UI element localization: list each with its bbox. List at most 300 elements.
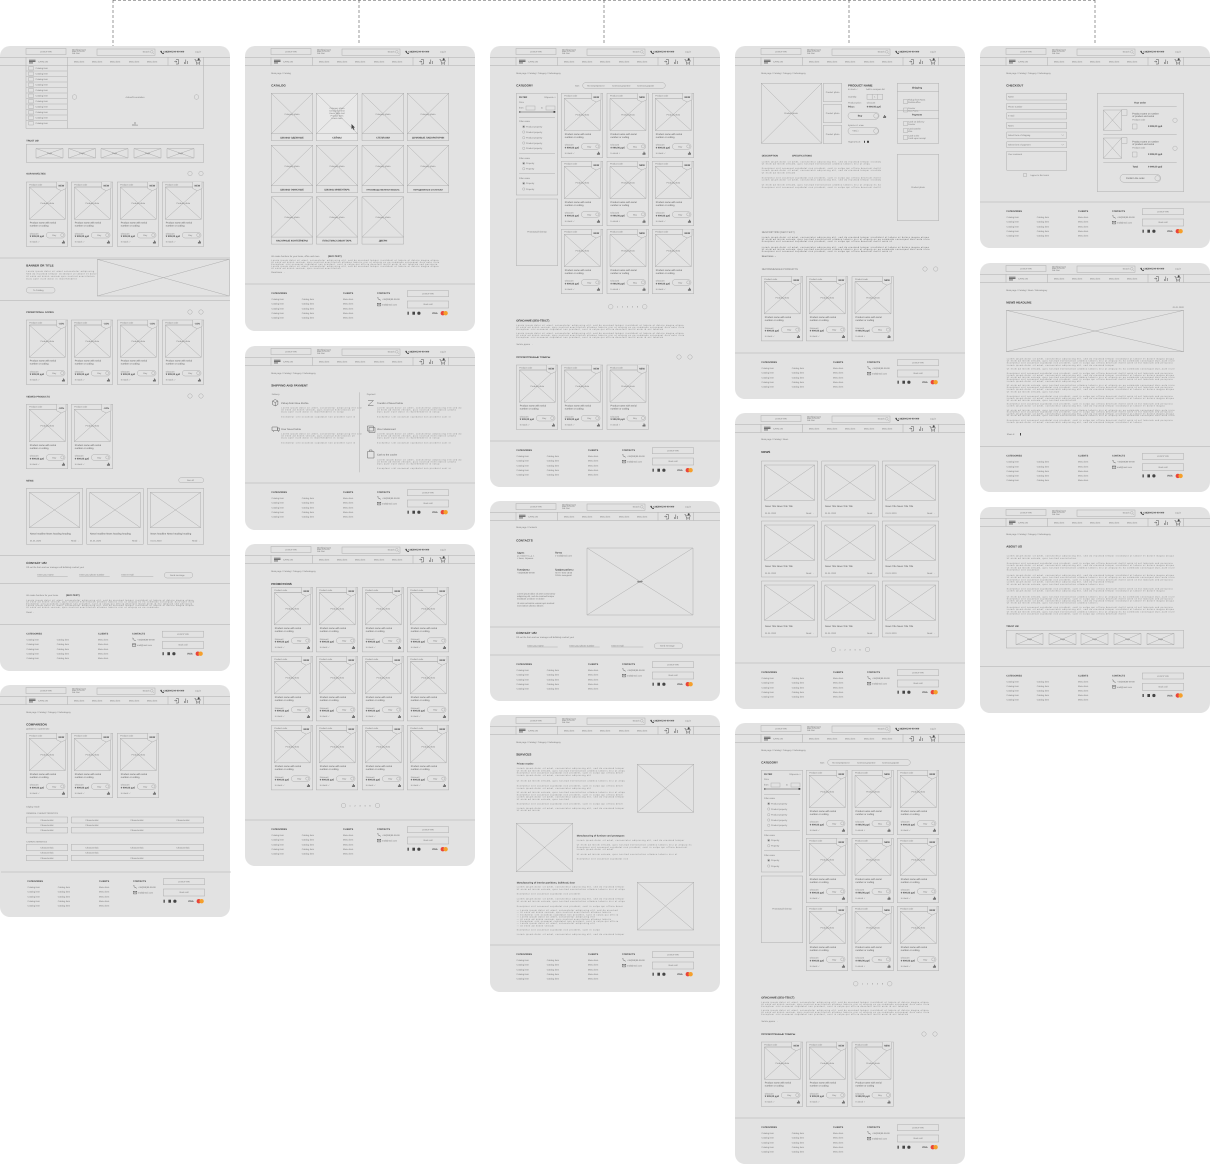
footer: Catalog item <box>28 895 40 898</box>
payment column: Ut enim ad minim veniam, quis nostrud exercitation ullamc <box>377 409 456 412</box>
trust us: Logo <box>80 152 85 155</box>
catalog list: Catalog item <box>36 106 48 108</box>
product card: Product code <box>655 231 669 234</box>
product card: Product photo <box>40 424 55 427</box>
news grid: News Title News Title Title <box>886 565 914 568</box>
product card: Discount <box>656 280 665 283</box>
category tiles: Category photo <box>376 165 391 168</box>
product card: Product photo <box>820 1062 835 1065</box>
seo text: Lorem ipsum dolor sit amet, consectetur adipiscing elit, sed do eiusmod tempor incididunt ut labore et dolore magna aliqua <box>26 604 194 607</box>
header: Menu item <box>882 60 892 63</box>
product card: NEW <box>685 96 691 99</box>
product card: Product name with serial <box>121 773 147 776</box>
footer: LOGOTYPE <box>667 954 680 956</box>
product card: Discount <box>810 327 819 330</box>
product card: number or coding <box>30 363 49 366</box>
product card: Discount <box>656 212 665 215</box>
footer: Catalog item <box>302 497 314 500</box>
divider <box>358 392 360 472</box>
product card: NEW <box>639 368 646 371</box>
category tiles: ПЛАСТМАССОВАЯ ТАРА <box>323 240 352 243</box>
product card: Product code <box>120 321 134 324</box>
header <box>245 348 475 366</box>
header: Menu item <box>1127 521 1137 524</box>
comparison table: Characteristic <box>40 824 55 827</box>
comparison table: Display mode <box>26 806 40 808</box>
footer: Menu item <box>588 968 598 971</box>
header: Mon-Fri 9-18 <box>1052 511 1065 514</box>
product card: number or coding <box>30 776 49 779</box>
article text: Lorem ipsum dolor sit amet, consectetur adipiscing elit, sed do eiusmod tempor incididunt ut labore <box>1007 421 1143 424</box>
footer: Catalog item <box>272 316 284 319</box>
product card: Product name with serial <box>901 878 927 881</box>
contact details <box>517 552 573 608</box>
product card: Discount <box>366 638 375 641</box>
product card <box>607 365 648 429</box>
pagination: 3 <box>627 306 629 308</box>
delivery column: Lorem ipsum dolor sit amet, consectetur adipiscing elit sed <box>281 433 362 436</box>
product card <box>71 182 113 246</box>
footer: VISA <box>1167 694 1173 697</box>
seo text: We make furniture for your home, office and more <box>271 255 320 258</box>
checkout form: I agree to the terms <box>1030 174 1050 177</box>
panel: news list page <box>735 413 965 709</box>
product card: Product name with serial <box>856 878 882 881</box>
footer: Menu item <box>1078 234 1088 237</box>
header: Menu item <box>582 60 592 63</box>
seo text: Lorem ipsum dolor sit amet, consectetur adipiscing elit, sed do eiusmod tempor incididunt ut labore et dolore magna aliqua <box>762 246 930 249</box>
product card: Buy <box>923 890 928 893</box>
product card: number or coding <box>320 699 339 702</box>
footer: VISA <box>677 973 683 976</box>
product card: number or coding <box>75 363 94 366</box>
footer: Menu item <box>588 973 598 976</box>
header: Menu item <box>882 427 892 430</box>
header: Menu item <box>1090 277 1100 280</box>
product card: 9 999,00 руб <box>520 418 535 421</box>
footer: CLIENTS <box>1078 674 1089 677</box>
breadcrumbs: Main page / Catalog / Category / Subcategory <box>516 72 562 75</box>
pagination: 4 <box>877 982 879 986</box>
breadcrumbs: Main page / Catalog <box>271 72 292 75</box>
footer: Catalog item <box>302 843 314 846</box>
header: Menu item <box>355 60 365 63</box>
footer: mail@mail.com <box>382 502 397 506</box>
product card: Discount <box>366 776 375 779</box>
footer <box>0 624 230 660</box>
footer: Catalog item <box>302 316 314 319</box>
product card <box>271 656 313 721</box>
service block 3: Excepteur sint occaecat cupidatat non proident <box>517 893 581 896</box>
footer: Menu item <box>343 312 353 315</box>
product gallery <box>761 83 842 144</box>
pagination: 5 <box>369 804 371 807</box>
comparison table: Characteristic <box>40 852 55 855</box>
product card: Product code <box>410 589 424 592</box>
product card: NEW <box>839 773 845 776</box>
description tabs <box>762 154 882 189</box>
news grid: 01.01.2020 <box>825 632 837 635</box>
product card <box>852 838 893 903</box>
footer <box>735 663 965 698</box>
product card: Buy <box>52 234 57 237</box>
footer: Catalog item <box>762 381 774 384</box>
pagination: 3 <box>849 648 851 651</box>
header: Log in <box>930 418 937 420</box>
checkout form: Phone number <box>1008 105 1023 108</box>
section: viewed products: ПРОСМОТРЕННЫЕ ТОВАРЫ <box>761 1033 796 1036</box>
product card: Product code <box>165 183 179 186</box>
news grid: 01.01.2020 <box>886 512 897 515</box>
product card: Buy <box>188 234 193 237</box>
product card: Product code <box>74 321 88 324</box>
product card: Product code <box>564 163 578 166</box>
product card: Product photo <box>866 926 881 929</box>
product card <box>117 733 159 798</box>
product card: In stock ✓ <box>166 378 176 382</box>
footer: Catalog item <box>762 385 774 388</box>
contact details: e-mail@mail.com <box>555 554 572 558</box>
contact us form: Send message <box>170 574 185 577</box>
catalog list: Catalog item <box>36 122 48 125</box>
footer: Catalog item <box>516 959 529 962</box>
footer: CLIENTS <box>343 292 354 295</box>
filter box: Property <box>771 859 780 862</box>
product gallery: Product photo <box>826 133 840 136</box>
contact us form: Enter E-mail <box>612 644 624 647</box>
product card: 9 999,00 руб <box>810 959 825 962</box>
header: Log in <box>440 50 447 54</box>
header: Menu item <box>882 737 892 740</box>
product card: Buy <box>143 785 148 788</box>
header: CATALOG <box>528 60 538 63</box>
footer: Catalog item <box>1037 470 1049 473</box>
footer: Catalog item <box>762 372 774 375</box>
payment column: Excepteur sint occaecat cupidatat non proident sunt in <box>377 442 452 445</box>
footer: VISA <box>1167 475 1173 478</box>
sort control: Сначала дороже <box>637 84 655 87</box>
service block 1: Lorem ipsum dolor sit amet, consectetur adipiscing elit <box>517 774 591 777</box>
product card: NEW <box>930 909 936 912</box>
product card: In stock ✓ <box>366 646 376 649</box>
product card: In stock ✓ <box>411 646 421 649</box>
footer: Back call <box>424 303 433 306</box>
product card: Product code <box>319 658 333 661</box>
product card: Buy <box>787 328 792 332</box>
seo text: Ut enim ad minim veniam, quis nostrud exercitation ullamco laboris nisi ut aliquip ex ea commodo consequat duis aute irure <box>761 1003 930 1006</box>
contact us form: Fill out the form and our manager will definitely contact you! <box>26 566 84 569</box>
product card: 9 999,00 руб <box>856 330 870 332</box>
category tiles: Description text <box>329 110 345 112</box>
product card: number or coding <box>901 949 920 952</box>
product card: NEW <box>440 659 446 662</box>
footer: CLIENTS <box>588 449 599 452</box>
header: LOGOTYPE <box>40 689 53 692</box>
category tiles: СТЕЛЛАЖИ <box>376 136 390 139</box>
footer: Menu item <box>588 669 598 672</box>
product card: In stock ✓ <box>275 646 285 649</box>
category tiles: ШКАФЫ ОДЕЖНЫЕ <box>280 136 304 139</box>
header: Menu item <box>337 558 347 561</box>
article text: Lorem ipsum dolor sit amet, consectetur adipiscing elit, sed do eiusmod tempor <box>1007 364 1115 367</box>
footer: CATEGORIES <box>516 953 532 956</box>
seo text <box>271 255 440 274</box>
product card: Product photo <box>176 202 191 205</box>
product card: number or coding <box>320 768 339 771</box>
product card: NEW <box>639 96 646 99</box>
footer: CATEGORIES <box>761 361 777 364</box>
product card: number or coding <box>810 1085 829 1088</box>
product card <box>806 906 848 971</box>
pagination: 4 <box>632 306 634 308</box>
footer: Catalog item <box>28 900 40 903</box>
footer: VISA <box>1167 230 1173 233</box>
footer: Catalog item <box>302 307 314 310</box>
footer: CLIENTS <box>343 828 354 831</box>
product card: In stock ✓ <box>765 1100 775 1104</box>
product card <box>316 656 358 721</box>
footer: Back call <box>914 1137 923 1140</box>
product card: In stock ✓ <box>30 240 40 244</box>
heading: CATEGORY <box>761 760 778 764</box>
header: Menu item <box>74 60 84 63</box>
footer: mail@mail.com <box>627 964 642 968</box>
footer: Catalog item <box>516 455 529 458</box>
about text: Lorem ipsum dolor sit amet, consectetur adipiscing elit, sed do eiusmod tempor <box>1007 581 1115 584</box>
delivery column: Excepteur sint occaecat cupidatat non proident sunt in <box>281 416 356 419</box>
filter box: Product property <box>526 126 543 128</box>
product card: Product name with serial <box>121 222 147 225</box>
contact us form: CONTACT US! <box>516 631 537 635</box>
hero banner <box>72 95 199 126</box>
service block 1: Ut enim ad minim veniam, quis nostrud exercitation ullamco laboris nisi ut aliqu <box>517 769 626 772</box>
section: news <box>26 478 204 544</box>
product card: NEW <box>395 590 401 593</box>
product card: number or coding <box>810 319 829 322</box>
footer: Catalog item <box>516 968 529 971</box>
contact us form: Enter your phone number <box>80 574 105 576</box>
footer: Catalog item <box>792 1132 804 1135</box>
footer: Catalog item <box>28 891 40 894</box>
footer: VISA <box>677 469 683 472</box>
product info: In stock ✓ <box>848 88 858 91</box>
shipping and payment box: Cash upon receipt <box>908 137 926 140</box>
product card: NEW <box>884 773 891 776</box>
product card: Product code <box>319 727 333 730</box>
header: +38(099) 99-99-999 <box>898 418 920 420</box>
header: Sat-Sun <box>562 721 571 724</box>
heading: CONTACTS <box>516 538 533 542</box>
product card: In stock ✓ <box>366 715 376 718</box>
footer: Back call <box>669 460 678 463</box>
product card: Discount <box>320 707 329 710</box>
product card: Product code <box>120 735 134 738</box>
product card: Product photo <box>376 608 391 610</box>
product card: Product photo <box>820 858 835 861</box>
header: Working hours <box>562 504 577 506</box>
filter box: to <box>786 783 789 786</box>
news grid: News Title News Title Title <box>765 505 793 508</box>
product card: In stock ✓ <box>810 965 820 968</box>
category tiles: СЕЙФЫ <box>332 135 342 139</box>
header: Sat-Sun <box>562 507 571 510</box>
product card: Product name with serial <box>765 1082 791 1085</box>
product card: Product photo <box>866 858 881 861</box>
comparison table: Characteristic <box>40 819 55 822</box>
product card: Product photo <box>285 746 300 748</box>
product card: 9 999,00 руб <box>75 786 90 789</box>
product card: In stock ✓ <box>411 715 421 718</box>
header: Log in <box>1175 268 1182 270</box>
header: CATALOG <box>773 427 783 430</box>
footer: Catalog item <box>1037 699 1049 702</box>
service block 3: Lorem ipsum dolor sit amet, consectetur adipiscing elit, sed do eiusmod tempor <box>517 886 625 889</box>
header: LOGOTYPE <box>1020 50 1033 53</box>
product card: Buy <box>143 234 148 237</box>
service block 1: Ut enim ad minim veniam, quis nostrud <box>517 798 570 801</box>
news grid: Read → <box>806 512 814 515</box>
product card: 9 999,00 руб <box>810 891 825 894</box>
product card: Product name with serial <box>30 444 56 447</box>
footer: VISA <box>922 691 928 694</box>
footer: LOGOTYPE <box>422 292 435 296</box>
service block 1: Excepteur sint occaecat cupidatat non proident, sunt in culpa qui officia deser <box>517 802 623 806</box>
header: Log in <box>930 50 937 54</box>
category tiles: Product lines <box>331 114 344 118</box>
product card: number or coding <box>275 768 294 771</box>
footer: Catalog item <box>1006 470 1019 473</box>
product card: In stock ✓ <box>75 792 85 795</box>
footer <box>980 202 1210 237</box>
footer: Catalog item <box>1037 694 1049 697</box>
product card: number or coding <box>565 408 584 411</box>
footer: Menu item <box>343 839 353 842</box>
section: news: News headline News heading heading <box>90 532 131 536</box>
banner section: Ut enim ad minim veniam quis nostrud exercitation <box>26 275 95 278</box>
product card: Buy <box>342 708 347 712</box>
filter box <box>761 770 803 872</box>
footer: Menu item <box>833 695 843 698</box>
product card: Discount <box>810 889 819 892</box>
header: LOGOTYPE <box>775 727 788 730</box>
product card: Product name with serial <box>121 360 147 363</box>
banner section <box>0 258 230 300</box>
header: Menu item <box>1054 277 1064 280</box>
header <box>980 266 1210 282</box>
category tiles: Category photo <box>330 107 345 110</box>
filter box: from <box>519 106 524 109</box>
category tiles: ШКАФЫ ОФИСНЫЕ <box>280 188 304 191</box>
product card: NEW <box>59 736 65 739</box>
footer: CLIENTS <box>833 361 844 364</box>
pagination: 4 <box>854 648 856 651</box>
ad banner: Рекламный баннер <box>772 908 793 910</box>
delivery column: Ut enim ad minim veniam, quis nostrud exercitation ull <box>281 435 355 438</box>
filter box <box>516 93 558 195</box>
header: Menu item <box>92 699 102 702</box>
footer: Menu item <box>99 891 109 894</box>
delivery column: Door Nova Poshta <box>281 428 302 431</box>
product card: Product code <box>900 772 914 775</box>
footer: CLIENTS <box>833 671 844 674</box>
product card: Product photo <box>376 746 391 748</box>
footer: Catalog item <box>792 385 804 388</box>
footer: Catalog item <box>1037 234 1049 237</box>
footer: Back call <box>424 502 433 505</box>
footer: Catalog item <box>57 657 69 660</box>
footer: Catalog item <box>1006 685 1019 688</box>
product card <box>852 906 893 971</box>
product card: NEW <box>440 590 446 593</box>
footer: Catalog item <box>547 977 559 980</box>
footer: mail@mail.com <box>137 644 152 647</box>
news grid: News Title News Title Title <box>825 625 853 628</box>
header: Working hours <box>807 48 822 52</box>
footer: Catalog item <box>516 973 529 976</box>
product card: Product photo <box>775 296 790 300</box>
product card: number or coding <box>856 813 875 816</box>
seo text: ОПИСАНИЕ (SEO-ТЕКСТ) <box>761 997 794 1000</box>
product card: Product photo <box>85 753 100 756</box>
product card: Buy <box>52 372 57 375</box>
about text: Lorem ipsum dolor sit amet, consectetur adipiscing elit, sed do eiusmod tempor incididunt ut labore et dolore magna aliqua <box>1007 554 1175 558</box>
connector: dashed flow lines <box>113 0 1095 72</box>
header: Log in <box>1175 512 1182 514</box>
service block 3: Lorem ipsum dolor sit amet, consectetur adipiscing elit, sed do eiusmod tempor <box>517 897 625 900</box>
article text: Excepteur sint occaecat cupidatat non proident, sunt in culpa qui officia deserunt mollit anim id est laborum sed perspicia <box>1007 372 1173 375</box>
footer: LOGOTYPE <box>912 362 925 364</box>
product card: Product code <box>319 589 333 592</box>
news grid: News Title News Title Title <box>825 505 853 508</box>
header: Search <box>878 50 885 54</box>
footer: LOGOTYPE <box>422 828 435 832</box>
trust us: Logo <box>47 152 53 155</box>
footer: VISA <box>187 652 193 656</box>
trust us: Logo <box>1027 638 1033 641</box>
product card: Product code <box>610 95 624 98</box>
footer: Menu item <box>588 473 598 476</box>
footer: Menu item <box>99 895 109 898</box>
product card: Product photo <box>621 113 636 116</box>
product card: 9 999,00 руб <box>765 1095 780 1098</box>
ad banner: Рекламный баннер <box>527 230 548 234</box>
header: Working hours <box>317 348 332 352</box>
header: Sat-Sun <box>807 729 816 732</box>
footer <box>1 872 231 907</box>
product card <box>26 182 68 246</box>
product card: NEW <box>884 279 891 282</box>
product card: number or coding <box>856 949 875 952</box>
order summary: Your order <box>1134 102 1146 104</box>
product card: In stock ✓ <box>610 288 621 291</box>
product card: NEW <box>395 659 401 662</box>
payment column: Duis aute irure dolor in reprehenderit in volup <box>377 411 440 414</box>
product card: number or coding <box>121 363 140 366</box>
header: Mon-Fri 9-18 <box>807 727 820 730</box>
payment column: Excepteur sint occaecat cupidatat non proident sunt in <box>377 416 452 419</box>
product card <box>607 229 648 294</box>
order summary: 9 999,00 руб <box>1148 125 1163 128</box>
footer <box>980 666 1210 702</box>
payment column: Lorem ipsum dolor sit amet, consectetur adipiscing elit sed do <box>377 458 462 462</box>
breadcrumbs: Main page / Catalog / News / Subcategory <box>1006 289 1048 292</box>
footer: CONTACTS <box>867 1126 881 1129</box>
product card: Product code <box>809 908 823 911</box>
banner section: Sed do eiusmod tempor incididunt ut labore et dolor <box>26 272 97 275</box>
heading: SHIPPING AND PAYMENT <box>271 383 308 387</box>
product card: Discount <box>121 784 130 787</box>
footer: Menu item <box>1078 474 1088 477</box>
